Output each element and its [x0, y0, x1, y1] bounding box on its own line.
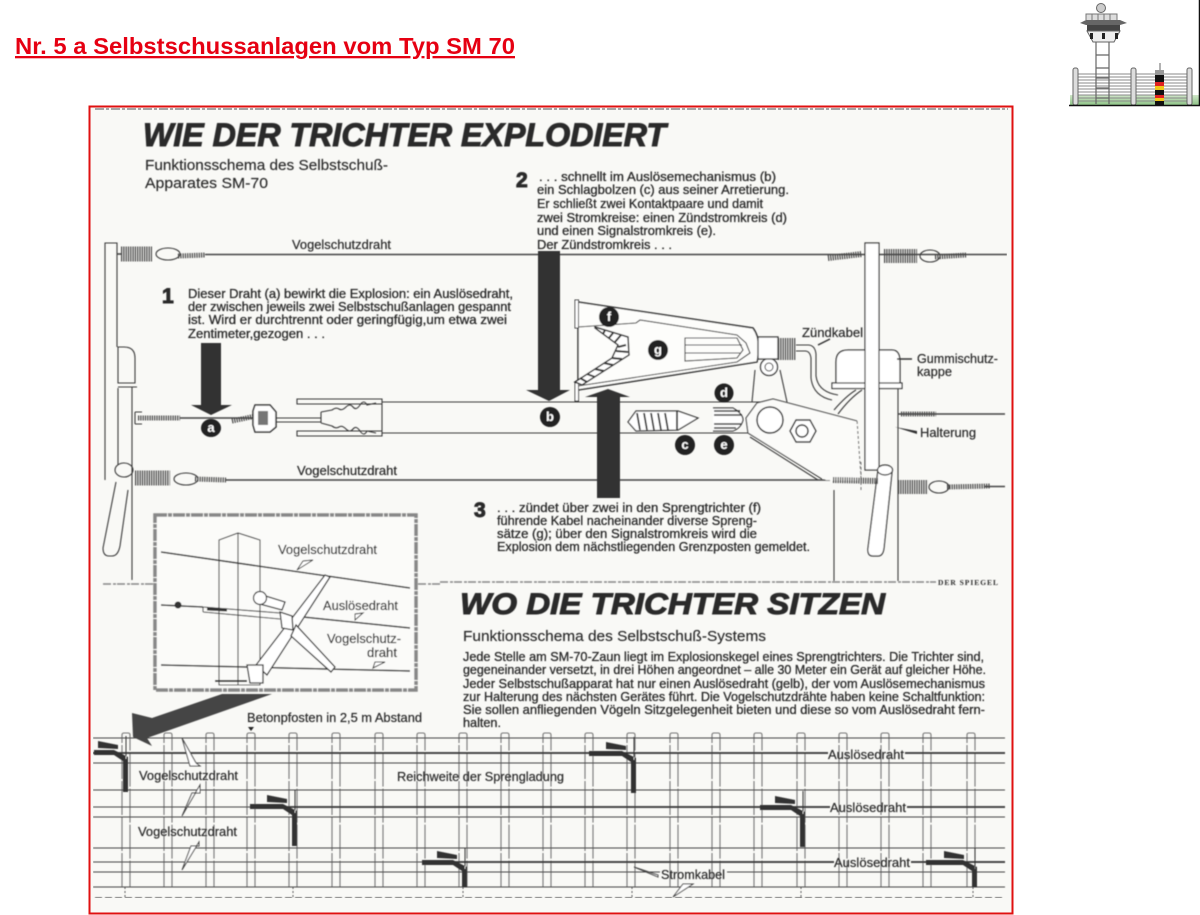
label: Auslösedraht 1: Auslösedraht [828, 748, 905, 762]
section divider and credit: DER SPIEGEL [938, 578, 998, 587]
marker e: e [720, 437, 728, 452]
text block: step 3 [474, 499, 810, 554]
text block: system description [463, 649, 986, 730]
text block: step 3: sätze (g); über den Signalstromkreis wird die [497, 526, 757, 541]
marker d: d [720, 385, 728, 400]
label: Gummischutzkappe [897, 352, 998, 379]
marker b: b [546, 409, 554, 424]
device 6 [926, 848, 977, 887]
subheading: Funktionsschema des Apparates: Apparates SM-70 [145, 175, 268, 192]
heading: Wo die Trichter sitzen: WO DIE TRICHTER SITZEN [460, 588, 886, 621]
label: Gummischutzkappe: kappe [917, 365, 952, 379]
text block: step 2: zwei Stromkreise: einen Zündstromkreis (d) [537, 210, 787, 225]
label: Betonpfosten: Betonpfosten in 2,5 m Abstand [247, 711, 422, 725]
label: Stromkabel: Stromkabel [661, 868, 725, 882]
device 1 [94, 736, 128, 792]
text block: step 2: ein Schlagbolzen (c) aus seiner Arretierung. [537, 182, 789, 197]
label: Vogelschutzdraht 1: Vogelschutzdraht [139, 769, 239, 783]
mechanism housing tube [297, 399, 772, 436]
text block: step 2 [516, 169, 789, 252]
label: inset Vogelschutz-draht: draht [367, 646, 398, 660]
text block: system description: zur Halterung des nächsten Gerätes führt. Die Vogelschutzdrähte haben keine Schaltfunktion: [463, 689, 985, 704]
label: Betonpfosten [247, 711, 422, 731]
left post and springs [103, 243, 226, 580]
marker g: g [654, 342, 662, 357]
text block: step 3: 3 [474, 499, 486, 522]
text block: step 2: und einen Signalstromkreis (e). [537, 223, 716, 238]
inset: detail view of device [155, 515, 416, 690]
pointers [182, 738, 693, 897]
label: inset Vogelschutz-draht [327, 632, 401, 660]
label: inset Vogelschutz-draht: Vogelschutz- [327, 632, 401, 646]
marker g [648, 340, 668, 360]
icon: watchtower and fence logo [1069, 0, 1200, 106]
explosive funnel with charges [575, 300, 759, 401]
text block: step 3: . . . zündet über zwei in den Sprengtrichter (f) [497, 500, 761, 515]
text block: system description: gegeneinander versetzt, in drei Höhen angeordnet – alle 30 Meter ein Gerät auf gleicher Höhe. [463, 662, 986, 677]
device 4 [589, 737, 636, 793]
marker a [201, 419, 221, 437]
device 3 [422, 848, 467, 887]
subheading: Funktionsschema des Apparates [145, 157, 388, 192]
text block: system description: Jede Stelle am SM-70-Zaun liegt im Explosionskegel eines Sprengtrichters. Die Trichter sind, [463, 649, 984, 664]
text block: step 2: . . . schnellt im Auslösemechanismus (b) [539, 169, 776, 184]
right post, cap and springs [828, 243, 1005, 581]
label: Halterung: Halterung [920, 426, 976, 440]
label: Vogelschutzdraht 2: Vogelschutzdraht [138, 825, 238, 839]
label: Zündkabel: Zündkabel [802, 326, 863, 340]
text block: step 3: Explosion dem nächstliegenden Grenzposten gemeldet. [497, 539, 810, 554]
marker f [599, 307, 619, 327]
text block: system description: halten. [463, 715, 501, 730]
fence elevation diagram [93, 733, 1005, 898]
label: Vogelschutzdraht top: Vogelschutzdraht [292, 238, 392, 252]
marker b [540, 407, 560, 427]
top bird protection wire [205, 254, 1007, 256]
arrow: inset to fence [132, 694, 272, 746]
arrow 2 [526, 251, 570, 401]
text block: step 1: der zwischen jeweils zwei Selbstschußanlagen gespannt [188, 299, 511, 314]
trip wires [93, 753, 1005, 862]
label: Reichweite: Reichweite der Sprengladung [397, 770, 564, 784]
page title: Nr. 5 a Selbstschussanlagen vom Typ SM 70 [15, 33, 515, 59]
text block: step 3: führende Kabel nacheinander diverse Spreng- [497, 513, 757, 528]
text block: system description: Sie sollen anfliegenden Vögeln Sitzgelegenheit bieten und diese so vom Auslösedraht fern- [463, 702, 985, 717]
label: Vogelschutzdraht bottom: Vogelschutzdraht [297, 464, 398, 478]
panel: scanned newspaper diagram [90, 106, 1012, 914]
text block: step 2: Der Zündstromkreis . . . [537, 237, 672, 252]
text block: step 1: Zentimeter,gezogen . . . [188, 326, 325, 341]
label: inset Auslösedraht: Auslösedraht [323, 599, 399, 613]
text block: step 1 [162, 285, 513, 341]
bracket plate and pivot [746, 358, 861, 480]
bottom bird protection wire [226, 479, 830, 481]
text block: system description: Jeder Selbstschußapparat hat nur einen Auslösedraht (gelb), der vom Auslösemechanismus [463, 676, 985, 691]
text block: step 2: 2 [516, 169, 528, 192]
subheading: Funktionsschema des Apparates: Funktionsschema des Selbstschuß- [145, 157, 388, 174]
fence wires [93, 738, 1005, 887]
ignition cable and connector [758, 337, 862, 414]
marker f: f [607, 309, 612, 324]
text block: step 1: 1 [162, 285, 174, 308]
firing bolt c and contacts d, e [628, 384, 743, 455]
label: inset Vogelschutzdraht: Vogelschutzdraht [278, 543, 378, 557]
fence posts [122, 733, 975, 887]
ground cable [95, 897, 1005, 899]
heading: Wie der Trichter explodiert: WIE DER TRICHTER EXPLODIERT [143, 117, 668, 153]
marker c: c [681, 437, 689, 452]
subheading: Funktionsschema des Systems: Funktionsschema des Selbstschuß-Systems [463, 628, 766, 645]
label: Halterung [895, 426, 976, 440]
text block: step 2: Er schließt zwei Kontaktpaare und damit [537, 196, 763, 211]
arrow 1 [191, 343, 232, 415]
marker a: a [207, 420, 215, 435]
label: Auslösedraht 3: Auslösedraht [834, 856, 911, 870]
label: Auslösedraht 2: Auslösedraht [830, 801, 907, 815]
text block: step 1: Dieser Draht (a) bewirkt die Explosion: ein Auslösedraht, [188, 286, 513, 301]
label: Gummischutzkappe: Gummischutz- [917, 352, 998, 366]
arrow 3 [585, 389, 630, 498]
device 2 [250, 790, 297, 846]
trip wire and clevis [135, 405, 321, 432]
device 5 [760, 791, 805, 847]
text block: step 1: ist. Wird er durchtrennt oder geringfügig,um etwa zwei [188, 312, 507, 327]
